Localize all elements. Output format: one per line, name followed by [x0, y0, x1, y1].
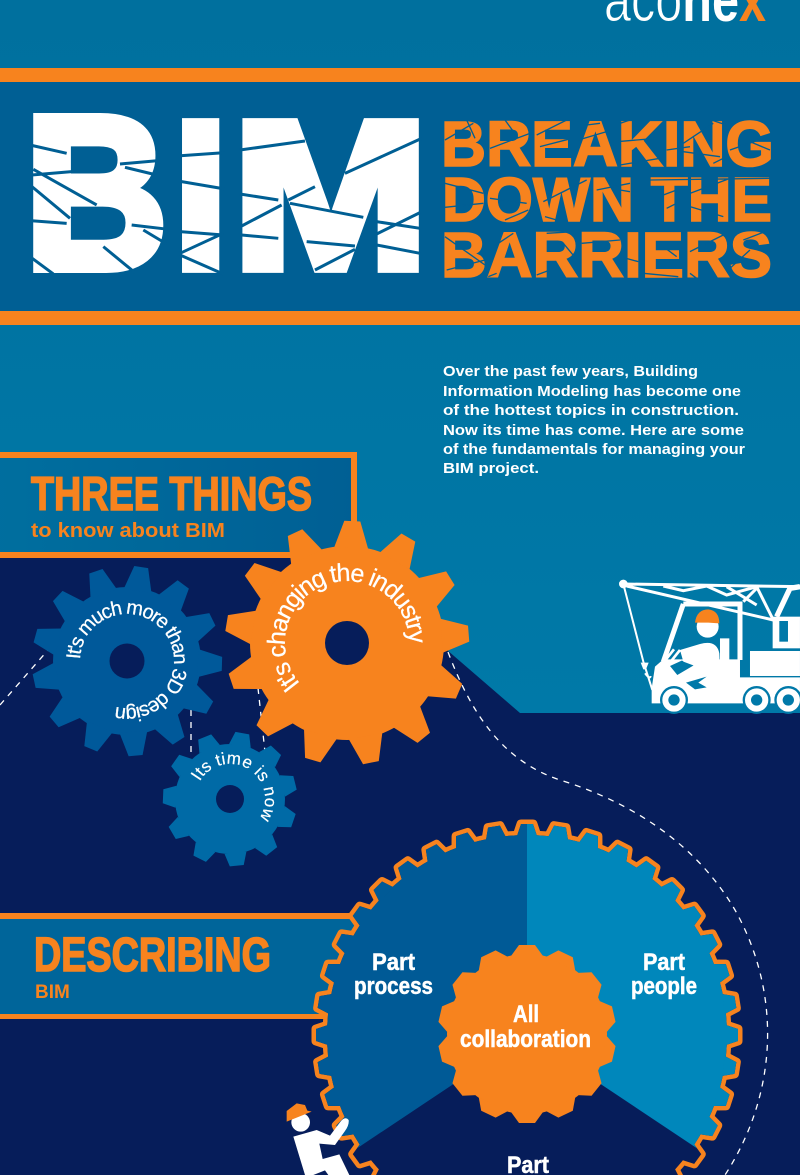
intro text: Information Modeling has become one: [443, 383, 741, 400]
label: part process: [354, 949, 433, 1000]
intro text: BIM project.: [443, 460, 539, 477]
title: Breaking down the barriers: BARRIERS: [441, 219, 772, 291]
title: BIM cracked lettering: M: [232, 77, 429, 313]
gear: its time is now: Its time is now: [190, 752, 274, 822]
subheading: BIM: BIM: [35, 982, 70, 1003]
gear: it's changing the industry: It's changing the industry: [266, 563, 423, 693]
intro text: [443, 363, 745, 477]
label: all collaboration: collaboration: [460, 1026, 591, 1053]
gear: much more than 3D design: It's much more than 3D design: [66, 601, 186, 722]
navy lower background: [0, 555, 800, 1175]
title: Breaking down the barriers: DOWN THE: [442, 166, 772, 235]
intro text: Now its time has come. Here are some: [443, 422, 744, 439]
label: part process: process: [354, 973, 433, 1000]
label: part process: Part: [372, 949, 415, 976]
hub gear: all collaboration: [437, 945, 617, 1123]
title: BIM cracked lettering: [24, 71, 429, 315]
intro text: of the hottest topics in construction.: [443, 402, 739, 419]
icon: crane truck: [619, 580, 800, 714]
label: all collaboration: [460, 1001, 591, 1053]
gear: much more than 3D design: [32, 566, 222, 756]
label: all collaboration: All: [513, 1001, 539, 1028]
title: BIM cracked lettering: B: [24, 71, 168, 315]
panel: describing banner: [0, 913, 360, 1019]
intro text: of the fundamentals for managing your: [443, 441, 745, 458]
gear: its time is now: [162, 732, 297, 866]
heading: three things: THREE THINGS: [31, 467, 312, 520]
chart: toothed collaboration wheel: [316, 824, 738, 1175]
subheading: to know about BIM: to know about BIM: [31, 519, 225, 542]
dashed connector lines: [0, 650, 768, 1175]
gear: it's changing the industry: [225, 520, 470, 764]
icon: climbing worker: [287, 1103, 349, 1175]
label: part people: [631, 949, 697, 1000]
title: Breaking down the barriers: BREAKING: [441, 108, 774, 180]
heading: describing: DESCRIBING: [34, 929, 271, 982]
title band: [0, 68, 800, 325]
title: BIM cracked lettering: I: [173, 79, 228, 314]
label: part people: people: [631, 973, 697, 1000]
segment: process: [316, 824, 527, 1148]
label: part people: Part: [643, 949, 685, 976]
title: Breaking down the barriers: [441, 108, 774, 291]
panel: three things banner: [0, 455, 354, 555]
intro text: Over the past few years, Building: [443, 363, 698, 380]
segment: people: [527, 824, 738, 1148]
